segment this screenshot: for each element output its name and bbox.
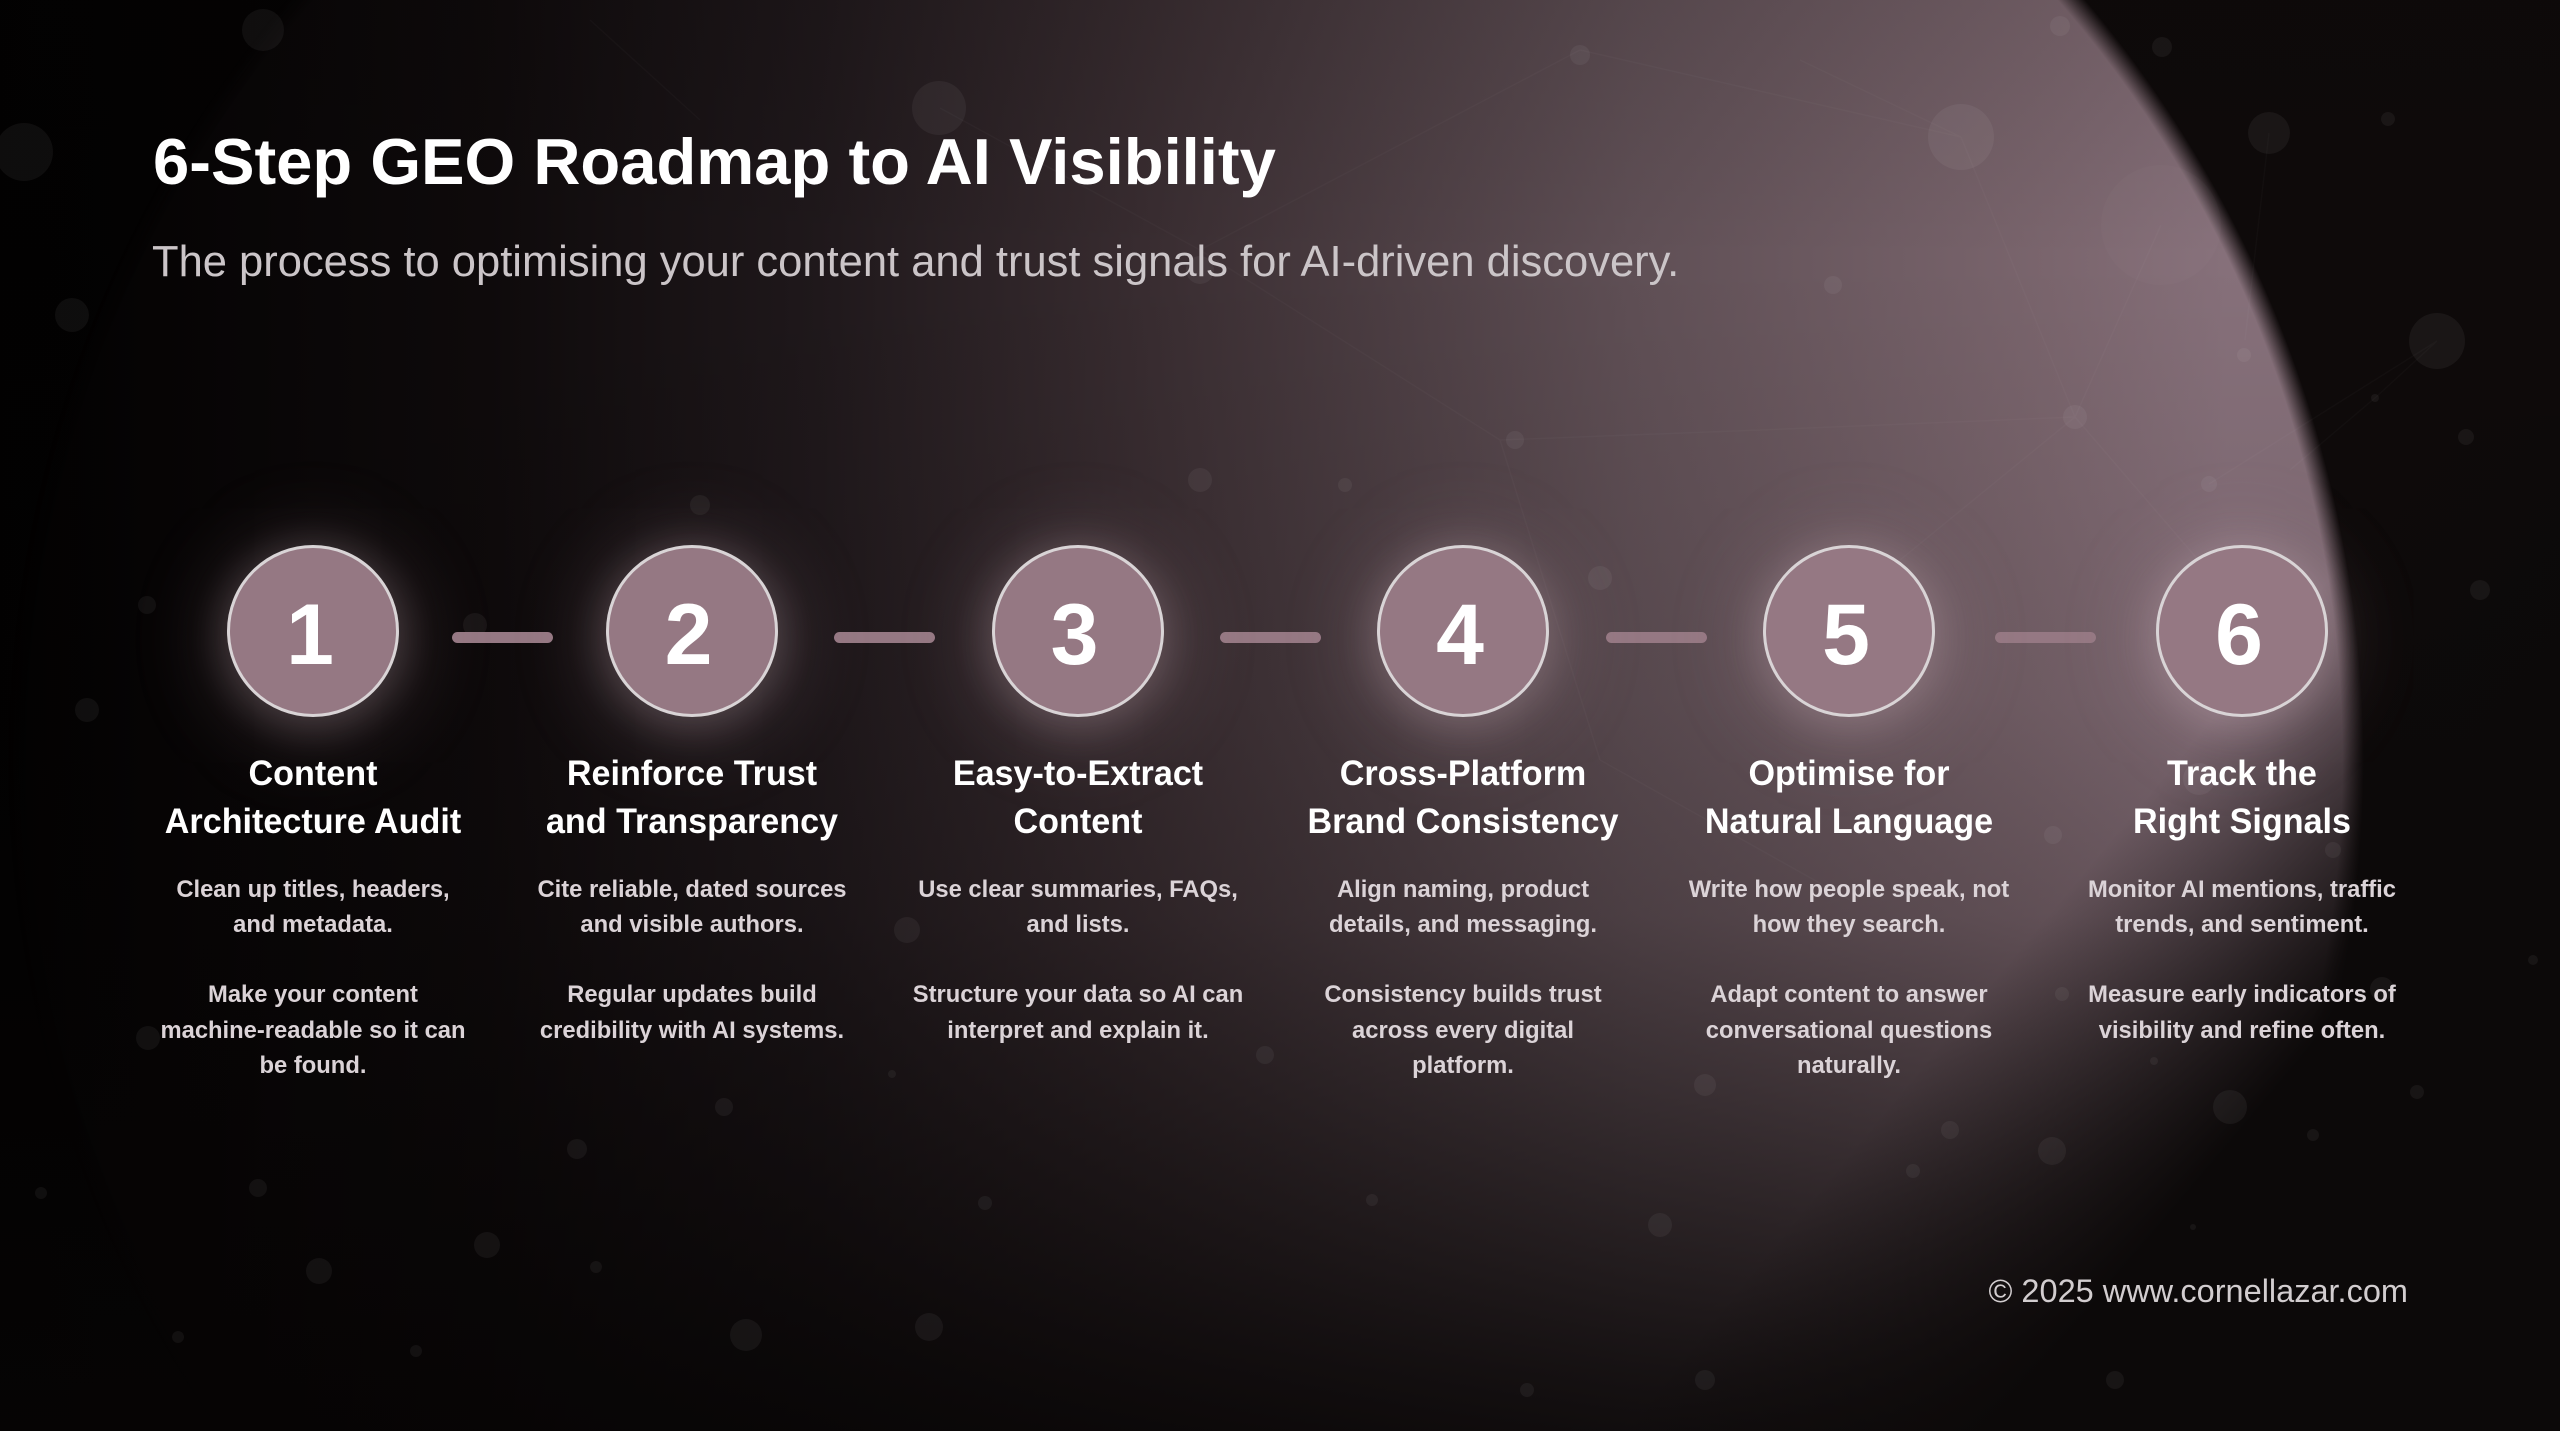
step 2 heading: Reinforce Trust	[566, 754, 817, 793]
step 3 description: Structure your data so AI can	[912, 981, 1243, 1008]
subtitle: The process to optimising your content and trust signals for AI-driven discovery.	[152, 238, 1679, 286]
step 2 description: credibility with AI systems.	[539, 1017, 844, 1044]
step 3 description: Use clear summaries, FAQs,	[918, 876, 1237, 902]
step 5 heading: Optimise for	[1748, 754, 1949, 793]
step 2 heading: and Transparency	[545, 802, 838, 841]
step 3 heading: Easy-to-Extract	[952, 754, 1203, 793]
step 3	[912, 520, 1243, 1044]
step 3 description	[912, 876, 1243, 1044]
step 5 description: Write how people speak, not	[1689, 876, 2009, 902]
step 6 description: Measure early indicators of	[2088, 981, 2396, 1008]
step 2 description: and visible authors.	[580, 911, 803, 938]
step 6 number circle	[2156, 545, 2328, 717]
step 5 description	[1688, 876, 2009, 1079]
step 5 heading	[1705, 754, 1993, 841]
step 1 description: and metadata.	[233, 911, 393, 938]
step 1 description: machine-readable so it can	[160, 1017, 466, 1044]
step 1 description: Clean up titles, headers,	[176, 876, 450, 902]
step 6 description: trends, and sentiment.	[2115, 911, 2369, 938]
step 1 number circle: 1	[286, 587, 334, 683]
step 6 heading	[2133, 754, 2351, 841]
step 1 description: be found.	[260, 1052, 366, 1079]
step 4 description: Consistency builds trust	[1324, 981, 1602, 1008]
step 6 heading: Right Signals	[2133, 802, 2351, 841]
connector 1-2	[452, 632, 553, 643]
footer copyright: © 2025 www.cornellazar.com	[1988, 1273, 2408, 1309]
step 5 heading: Natural Language	[1705, 802, 1993, 841]
connector 4-5	[1606, 632, 1707, 643]
step 5 number circle: 5	[1822, 587, 1870, 683]
step 5 description: conversational questions	[1706, 1017, 1992, 1044]
connector 2-3	[834, 632, 935, 643]
step 4 description: platform.	[1412, 1052, 1514, 1079]
step 6	[2088, 533, 2396, 1044]
step 5 description: Adapt content to answer	[1710, 981, 1988, 1008]
title: 6-Step GEO Roadmap to AI Visibility	[153, 125, 1276, 198]
step 5 description: how they search.	[1753, 911, 1945, 938]
step 3 number circle: 3	[1051, 587, 1098, 683]
step 4 number circle	[1377, 545, 1549, 717]
step 4 heading	[1308, 754, 1618, 841]
step 1 number circle	[227, 545, 399, 717]
step 4 number circle: 4	[1436, 587, 1484, 683]
connector 3-4	[1220, 632, 1321, 643]
step 3 description: and lists.	[1026, 911, 1129, 938]
step 4 description: across every digital	[1352, 1017, 1574, 1044]
step 4 description: details, and messaging.	[1329, 911, 1597, 938]
step 1 heading: Architecture Audit	[165, 802, 461, 841]
step 1 description	[160, 876, 466, 1079]
step 3 number circle	[992, 545, 1164, 717]
step 3 heading: Content	[1013, 802, 1142, 841]
step 4 description: Align naming, product	[1337, 876, 1589, 902]
step 4 heading: Brand Consistency	[1308, 802, 1618, 841]
step 2 number circle: 2	[665, 587, 712, 683]
step 4 heading: Cross-Platform	[1340, 754, 1586, 793]
step 1 heading	[165, 754, 461, 841]
step 5 description: naturally.	[1797, 1052, 1901, 1079]
step 2 heading	[545, 754, 838, 841]
step 6 number circle: 6	[2215, 587, 2263, 683]
step 2 description	[537, 876, 846, 1044]
step 3 heading	[952, 754, 1203, 841]
step 3 description: interpret and explain it.	[947, 1017, 1208, 1044]
step 6 description: visibility and refine often.	[2099, 1017, 2385, 1044]
step 2 description: Regular updates build	[567, 981, 816, 1008]
step 1	[160, 516, 466, 1079]
step 1 description: Make your content	[208, 981, 418, 1008]
step 4 description	[1324, 876, 1602, 1079]
step 6 heading: Track the	[2167, 754, 2317, 793]
step 5 number circle	[1763, 545, 1935, 717]
step 2 number circle	[606, 545, 778, 717]
step 6 description	[2088, 876, 2396, 1044]
step 2 description: Cite reliable, dated sources	[537, 876, 846, 902]
step 2	[537, 516, 846, 1044]
step 4	[1308, 522, 1618, 1079]
step 6 description: Monitor AI mentions, traffic	[2088, 876, 2396, 902]
step 1 heading: Content	[249, 754, 377, 793]
connector 5-6	[1995, 632, 2096, 643]
step 5	[1688, 527, 2009, 1079]
